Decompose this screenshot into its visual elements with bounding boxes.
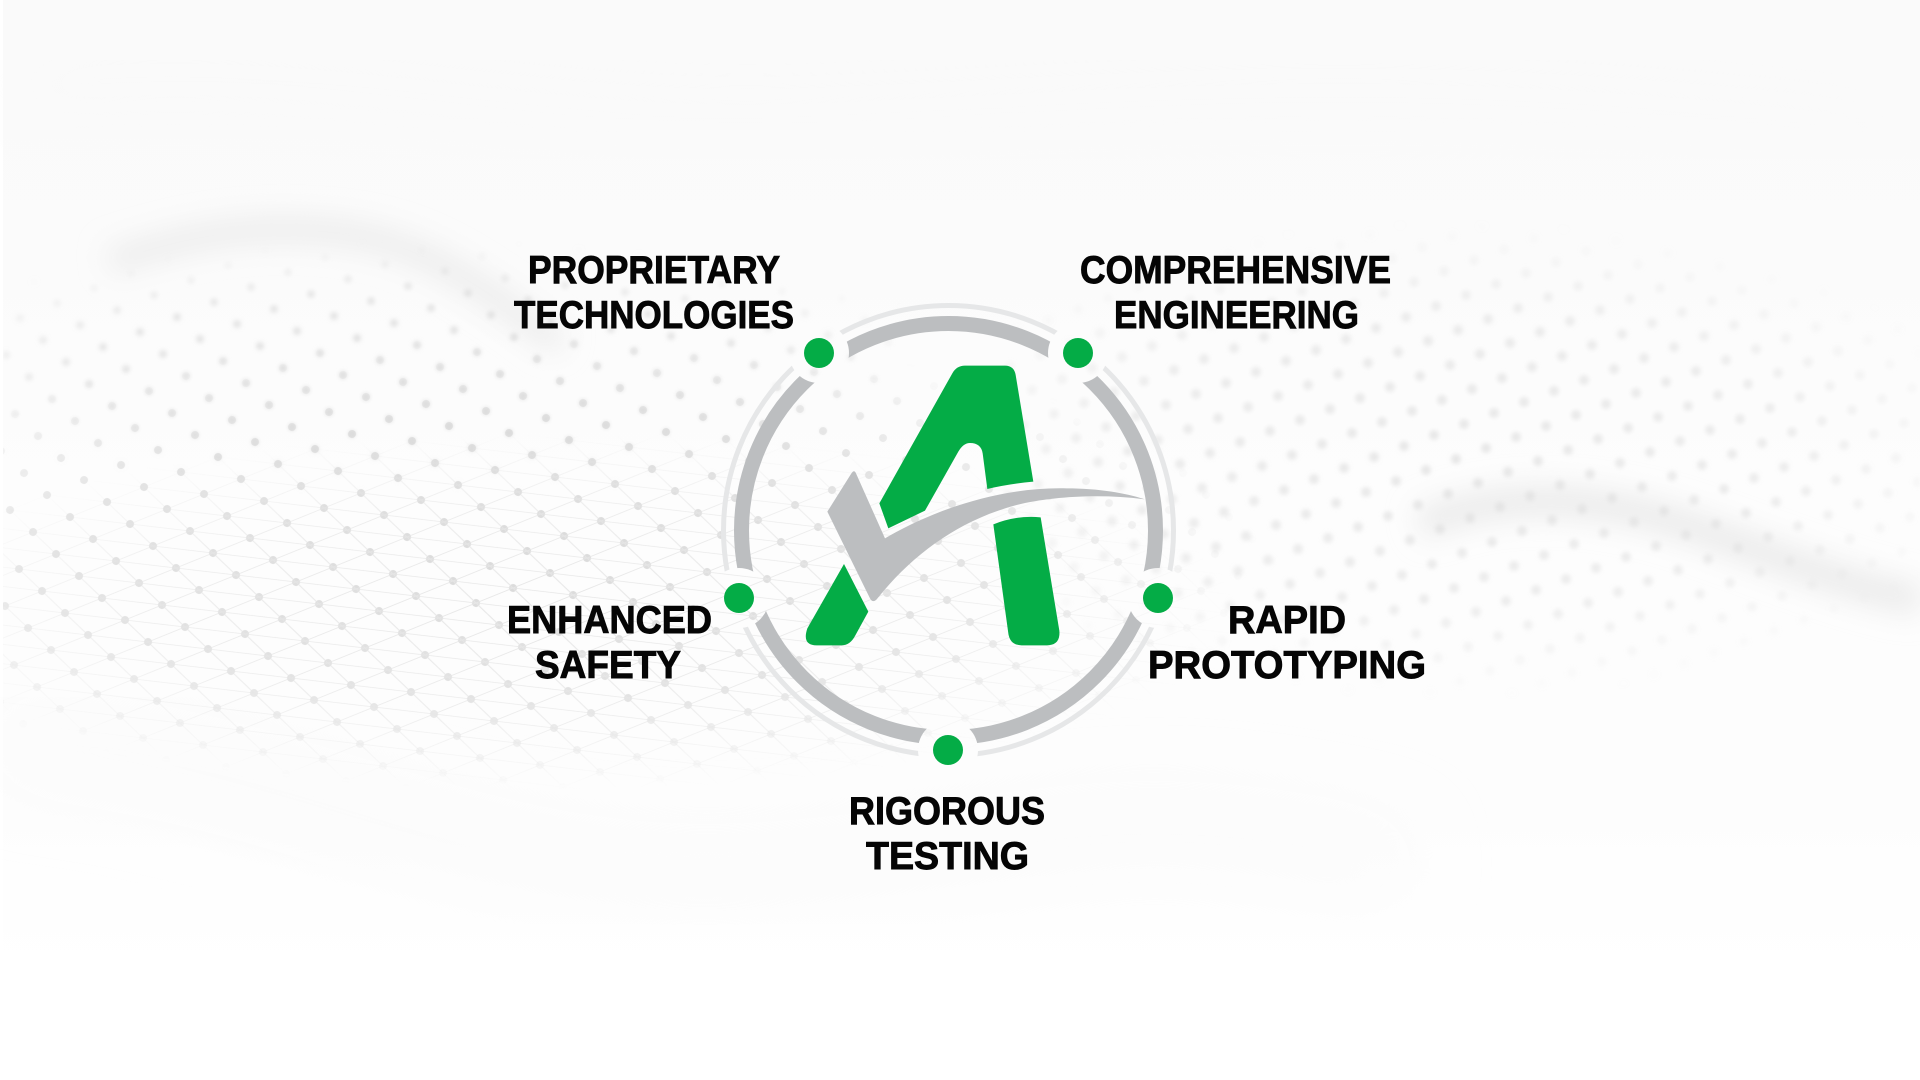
node dot: rapid prototyping (1143, 583, 1173, 613)
label: proprietary technologies: TECHNOLOGIES (514, 294, 794, 337)
label: proprietary technologies (514, 249, 794, 337)
label: rigorous testing (849, 790, 1045, 878)
node dot: comprehensive engineering (1063, 338, 1093, 368)
label: comprehensive engineering (1080, 249, 1391, 337)
logo A: left foot (806, 564, 868, 645)
logo A: right stem (993, 517, 1059, 645)
node dot: enhanced safety (724, 583, 754, 613)
label: proprietary technologies: PROPRIETARY (528, 249, 780, 292)
logo A: upper body (879, 366, 1033, 528)
label: rigorous testing: TESTING (866, 835, 1029, 878)
ring: segmented grey and light arcs (724, 306, 1174, 756)
label: enhanced safety (507, 599, 712, 687)
label: enhanced safety: SAFETY (535, 644, 681, 687)
logo check mark swoosh (827, 471, 1145, 601)
label: rigorous testing: RIGOROUS (849, 790, 1045, 833)
label: comprehensive engineering: ENGINEERING (1114, 294, 1359, 337)
background: soft white mesh wave (3, 208, 1920, 780)
node dot: rigorous testing (933, 735, 963, 765)
label: rapid prototyping (1148, 599, 1426, 687)
node dot: proprietary technologies (804, 338, 834, 368)
label: rapid prototyping: RAPID (1228, 599, 1346, 642)
label: rapid prototyping: PROTOTYPING (1148, 644, 1426, 687)
label: comprehensive engineering: COMPREHENSIVE (1080, 249, 1391, 292)
logo: green A with grey check mark (806, 366, 1145, 645)
label: enhanced safety: ENHANCED (507, 599, 712, 642)
circular diagram (724, 306, 1174, 765)
